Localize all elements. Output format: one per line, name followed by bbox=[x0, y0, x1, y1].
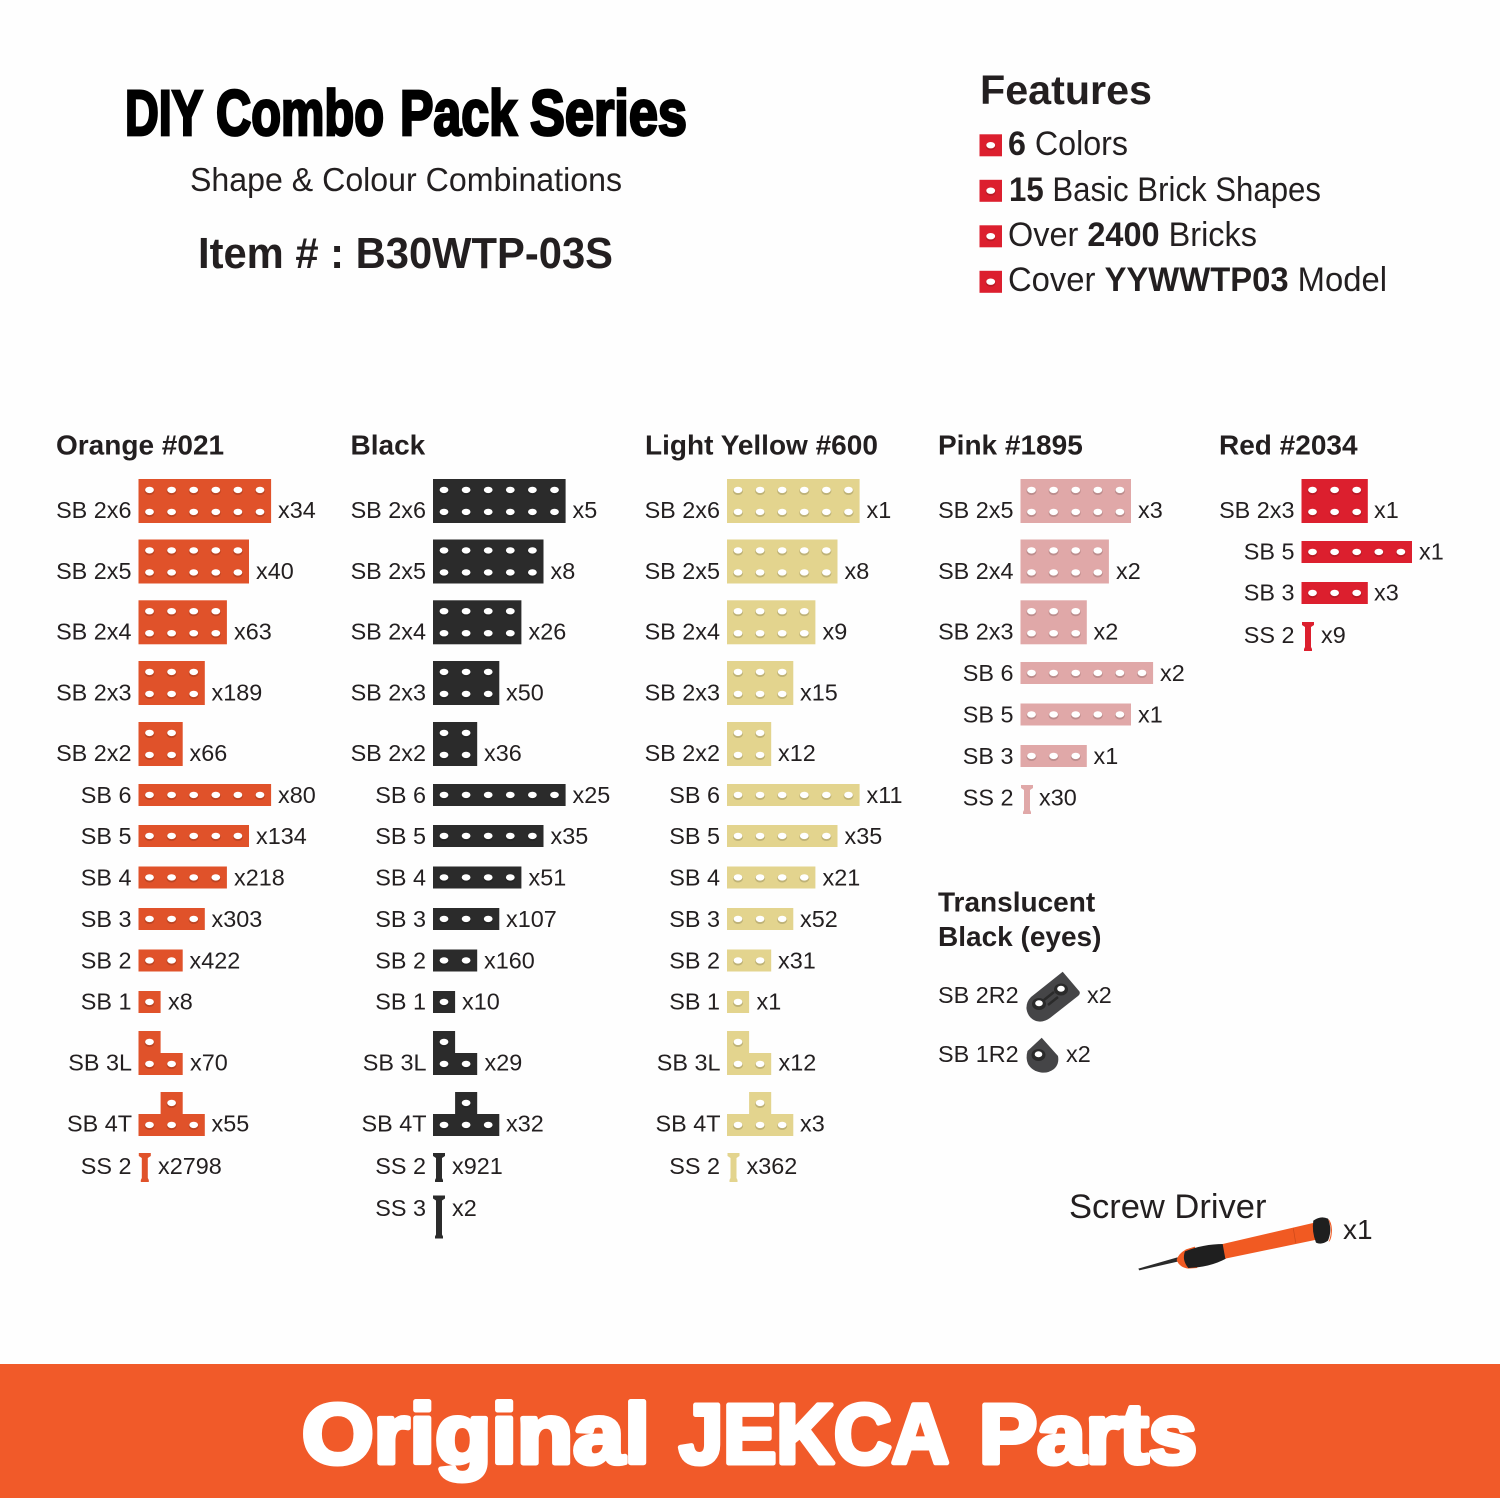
row: SB 2x2 bbox=[351, 722, 522, 766]
row: SB 2x4: x9 bbox=[822, 618, 847, 644]
heading: red: Red #2034 bbox=[1219, 430, 1358, 460]
row: SB 2x3: SB 2x3 bbox=[351, 680, 426, 706]
row: SS 3: x2 bbox=[452, 1195, 477, 1221]
row: SB 6 bbox=[81, 782, 316, 808]
row: SB 2x5 bbox=[645, 540, 869, 584]
row: SB 3L: x70 bbox=[190, 1050, 228, 1076]
feature: bricks: Over 2400 Bricks bbox=[1008, 216, 1257, 254]
row: SB 2: x31 bbox=[778, 948, 816, 974]
row: SB 5: SB 5 bbox=[375, 823, 426, 849]
row: SB 1: SB 1 bbox=[669, 988, 720, 1014]
row: SB 3: x1 bbox=[1094, 743, 1118, 769]
row: SB 4T: x32 bbox=[506, 1110, 544, 1136]
row: SB 6: x25 bbox=[572, 782, 610, 808]
row: SB 2x4: x63 bbox=[234, 618, 272, 644]
row: SS 2: x921 bbox=[452, 1153, 503, 1179]
row: SB 6 bbox=[375, 782, 610, 808]
row: SB 2x4: SB 2x4 bbox=[938, 558, 1014, 584]
row: SS 2: x9 bbox=[1321, 622, 1346, 648]
row: SB 2x3 bbox=[351, 661, 544, 706]
row: SB 6: SB 6 bbox=[375, 782, 426, 808]
row: SB 2x3: x1 bbox=[1374, 497, 1399, 523]
row: SB 2x2: x36 bbox=[484, 740, 522, 766]
row: SB 3L: x29 bbox=[484, 1050, 522, 1076]
row: SB 2x2: SB 2x2 bbox=[351, 740, 426, 766]
row: SB 1R2 bbox=[938, 1038, 1091, 1073]
row: SB 2: x422 bbox=[190, 948, 240, 974]
features heading: Features bbox=[980, 67, 1152, 113]
row: SB 3: SB 3 bbox=[963, 743, 1014, 769]
row: SS 2 bbox=[963, 784, 1077, 814]
row: SB 5: x1 bbox=[1138, 702, 1163, 728]
icon: bullet 4 bbox=[980, 271, 1002, 293]
row: SB 3 bbox=[1244, 580, 1399, 606]
row: SS 2 bbox=[81, 1153, 222, 1182]
row: SB 2x3: x189 bbox=[212, 680, 262, 706]
row: SB 6: x80 bbox=[278, 782, 316, 808]
row: SB 1: SB 1 bbox=[375, 988, 426, 1014]
title bbox=[125, 77, 687, 149]
row: SB 3: x52 bbox=[800, 906, 838, 932]
feature: shapes: 15 Basic Brick Shapes bbox=[1009, 171, 1321, 209]
row: SB 1R2: x2 bbox=[1066, 1041, 1091, 1067]
row: SB 2x5: SB 2x5 bbox=[938, 497, 1014, 523]
row: SB 2R2: SB 2R2 bbox=[938, 982, 1019, 1008]
row: SB 2x4: SB 2x4 bbox=[56, 618, 132, 644]
row: SB 2x3 bbox=[938, 600, 1118, 644]
row: SB 4: SB 4 bbox=[81, 864, 132, 890]
row: SB 1 bbox=[669, 988, 781, 1014]
row: SB 2x4 bbox=[938, 540, 1141, 584]
row: SB 2x3: SB 2x3 bbox=[938, 618, 1014, 644]
title: DIY bbox=[125, 77, 203, 149]
row: SB 2x6 bbox=[56, 479, 316, 523]
row: SB 4 bbox=[669, 864, 860, 890]
row: SB 4: x51 bbox=[528, 864, 566, 890]
row: SB 4: SB 4 bbox=[375, 864, 426, 890]
feature: model: Cover YYWWTP03 Model bbox=[1008, 261, 1387, 299]
row: SB 4 bbox=[81, 864, 285, 890]
row: SB 2x3 bbox=[1219, 479, 1399, 523]
row: SB 2x5 bbox=[938, 479, 1163, 523]
row: SB 2x5 bbox=[351, 540, 575, 584]
row: SB 3: x107 bbox=[506, 906, 557, 932]
row: SB 2: x160 bbox=[484, 948, 535, 974]
row: SB 2x3: x50 bbox=[506, 680, 544, 706]
row: SB 2x6: x1 bbox=[866, 497, 891, 523]
row: SB 2x4: x26 bbox=[528, 618, 566, 644]
footer text: Original bbox=[302, 1387, 650, 1481]
row: SB 1: x10 bbox=[462, 988, 500, 1014]
title: Pack bbox=[400, 77, 517, 149]
row: SB 5 bbox=[963, 702, 1163, 728]
heading: black: Black bbox=[350, 430, 426, 460]
row: SB 6: x2 bbox=[1160, 660, 1185, 686]
row: SB 2x5: x8 bbox=[844, 558, 869, 584]
row: SB 2x4 bbox=[351, 600, 566, 644]
row: SB 5: SB 5 bbox=[963, 702, 1014, 728]
row: SS 2: SS 2 bbox=[375, 1153, 426, 1179]
feature: colors: 6 Colors bbox=[1008, 125, 1128, 163]
panel: features bbox=[980, 67, 1387, 299]
row: SB 5: SB 5 bbox=[81, 823, 132, 849]
row: SS 2: SS 2 bbox=[963, 784, 1014, 810]
row: SB 6 bbox=[963, 660, 1185, 686]
row: SB 2x6: SB 2x6 bbox=[645, 497, 720, 523]
row: SB 5: SB 5 bbox=[1244, 538, 1294, 564]
row: SB 3: SB 3 bbox=[1244, 580, 1294, 606]
row: SB 3L bbox=[363, 1031, 522, 1076]
row: SB 4T bbox=[656, 1092, 825, 1136]
row: SB 3: SB 3 bbox=[81, 906, 132, 932]
footer banner bbox=[0, 1364, 1500, 1498]
row: SB 4T: SB 4T bbox=[362, 1110, 426, 1136]
row: SB 6: SB 6 bbox=[963, 660, 1014, 686]
panel: pink parts bbox=[938, 430, 1185, 814]
icon: bullet 2 bbox=[980, 180, 1002, 202]
row: SS 2 bbox=[669, 1153, 797, 1182]
row: SB 3: x3 bbox=[1374, 580, 1399, 606]
row: SB 4T: SB 4T bbox=[656, 1110, 720, 1136]
row: SB 1R2: SB 1R2 bbox=[938, 1041, 1019, 1067]
screw driver count: x1 bbox=[1343, 1214, 1373, 1245]
row: SB 2x4: SB 2x4 bbox=[351, 618, 426, 644]
row: SB 2R2 bbox=[938, 972, 1112, 1022]
row: SB 1: x1 bbox=[756, 988, 781, 1014]
row: SB 2x4: SB 2x4 bbox=[645, 618, 720, 644]
row: SB 4 bbox=[375, 864, 566, 890]
row: SB 3L: x12 bbox=[778, 1050, 816, 1076]
row: SB 2x2: x12 bbox=[778, 740, 816, 766]
label: screw driver: Screw Driver bbox=[1069, 1188, 1266, 1226]
row: SB 4T bbox=[67, 1092, 249, 1136]
row: SB 6: SB 6 bbox=[81, 782, 132, 808]
row: SS 2 bbox=[375, 1153, 503, 1182]
row: SS 3 bbox=[375, 1195, 477, 1238]
row: SS 2: SS 2 bbox=[669, 1153, 720, 1179]
row: SB 2x5: SB 2x5 bbox=[56, 558, 132, 584]
icon: bullet 3 bbox=[980, 225, 1002, 247]
row: SB 2: SB 2 bbox=[81, 948, 132, 974]
panel: black parts bbox=[350, 430, 610, 1238]
heading: light yellow: Light Yellow #600 bbox=[645, 430, 878, 460]
row: SB 3 bbox=[669, 906, 838, 932]
row: SB 2x3: SB 2x3 bbox=[56, 680, 132, 706]
row: SB 2x6: SB 2x6 bbox=[56, 497, 132, 523]
panel: red parts bbox=[1219, 430, 1444, 651]
footer text: JEKCA bbox=[679, 1387, 949, 1481]
row: SB 2x3: x2 bbox=[1094, 618, 1118, 644]
row: SB 2x2: SB 2x2 bbox=[645, 740, 720, 766]
row: SB 2x4 bbox=[645, 600, 847, 644]
row: SB 5 bbox=[81, 823, 307, 849]
icon: bullet 1 bbox=[980, 134, 1002, 156]
row: SB 2 bbox=[81, 948, 240, 974]
row: SB 3: SB 3 bbox=[375, 906, 426, 932]
row: SB 4T: x3 bbox=[800, 1110, 825, 1136]
row: SB 2x2 bbox=[645, 722, 816, 766]
row: SB 2x5: x3 bbox=[1138, 497, 1163, 523]
row: SB 2: SB 2 bbox=[375, 948, 426, 974]
row: SB 2x4 bbox=[56, 600, 272, 644]
row: SB 2x5: x8 bbox=[550, 558, 575, 584]
row: SB 2x6: x5 bbox=[572, 497, 597, 523]
row: SB 1 bbox=[375, 988, 500, 1014]
row: SB 6: SB 6 bbox=[669, 782, 720, 808]
row: SB 5 bbox=[1244, 538, 1444, 564]
row: SB 1: SB 1 bbox=[81, 988, 132, 1014]
row: SB 1: x8 bbox=[168, 988, 193, 1014]
row: SS 2: SS 2 bbox=[1244, 622, 1294, 648]
icon: screw driver bbox=[1138, 1217, 1332, 1270]
row: SB 2x5: SB 2x5 bbox=[351, 558, 426, 584]
footer text: Parts bbox=[979, 1387, 1197, 1481]
panel: orange parts bbox=[56, 430, 316, 1182]
row: SB 2x5 bbox=[56, 540, 294, 584]
title: Combo bbox=[216, 77, 384, 149]
row: SB 2R2: x2 bbox=[1087, 982, 1112, 1008]
row: SB 5: SB 5 bbox=[669, 823, 720, 849]
row: SB 2x2: SB 2x2 bbox=[56, 740, 132, 766]
row: SB 4: x21 bbox=[822, 864, 860, 890]
row: SB 2: SB 2 bbox=[669, 948, 720, 974]
row: SB 2x3: SB 2x3 bbox=[645, 680, 720, 706]
row: SB 5: x35 bbox=[550, 823, 588, 849]
heading: eyes: Black (eyes) bbox=[938, 921, 1101, 952]
heading: translucent black: Translucent bbox=[938, 886, 1095, 918]
footer text bbox=[302, 1387, 1197, 1481]
row: SB 3 bbox=[375, 906, 557, 932]
row: SB 2 bbox=[375, 948, 535, 974]
row: SB 5 bbox=[669, 823, 882, 849]
row: SB 4: x218 bbox=[234, 864, 285, 890]
row: SS 2 bbox=[1244, 622, 1346, 651]
row: SB 3L bbox=[68, 1031, 228, 1076]
row: SB 4T bbox=[362, 1092, 544, 1136]
row: SB 1 bbox=[81, 988, 193, 1014]
heading: orange: Orange #021 bbox=[56, 430, 224, 460]
row: SB 2x5: x40 bbox=[256, 558, 294, 584]
item number: Item # : B30WTP-03S bbox=[198, 229, 613, 278]
row: SB 3: SB 3 bbox=[669, 906, 720, 932]
row: SS 2: SS 2 bbox=[81, 1153, 132, 1179]
row: SB 2x3 bbox=[56, 661, 262, 706]
heading: pink: Pink #1895 bbox=[938, 430, 1083, 460]
row: SB 2x6 bbox=[645, 479, 891, 523]
row: SB 3: x303 bbox=[212, 906, 262, 932]
row: SB 2x2: x66 bbox=[190, 740, 227, 766]
row: SB 6 bbox=[669, 782, 902, 808]
panel: light yellow parts bbox=[645, 430, 902, 1182]
row: SS 2: x30 bbox=[1039, 784, 1077, 810]
row: SB 5 bbox=[375, 823, 588, 849]
row: SB 3 bbox=[81, 906, 262, 932]
title: Series bbox=[530, 77, 687, 149]
row: SB 3L: SB 3L bbox=[657, 1050, 720, 1076]
row: SB 2x5: SB 2x5 bbox=[645, 558, 720, 584]
row: SS 2: x362 bbox=[746, 1153, 797, 1179]
panel: translucent black parts bbox=[938, 886, 1112, 1073]
row: SB 2 bbox=[669, 948, 816, 974]
row: SB 5: x35 bbox=[844, 823, 882, 849]
row: SB 2x6: x34 bbox=[278, 497, 316, 523]
row: SB 5: x134 bbox=[256, 823, 307, 849]
row: SB 2x6 bbox=[351, 479, 597, 523]
row: SB 6: x11 bbox=[866, 782, 902, 808]
subtitle: Shape & Colour Combinations bbox=[190, 161, 622, 198]
row: SB 3L: SB 3L bbox=[363, 1050, 426, 1076]
row: SB 3L bbox=[657, 1031, 816, 1076]
row: SB 2x4: x2 bbox=[1116, 558, 1141, 584]
row: SB 4: SB 4 bbox=[669, 864, 720, 890]
row: SB 2x6: SB 2x6 bbox=[351, 497, 426, 523]
row: SB 5: x1 bbox=[1419, 538, 1444, 564]
row: SB 2x3: SB 2x3 bbox=[1219, 497, 1294, 523]
row: SS 3: SS 3 bbox=[375, 1195, 426, 1221]
row: SS 2: x2798 bbox=[158, 1153, 222, 1179]
row: SB 4T: x55 bbox=[212, 1110, 249, 1136]
row: SB 2x3 bbox=[645, 661, 838, 706]
row: SB 3 bbox=[963, 743, 1118, 769]
row: SB 2x3: x15 bbox=[800, 680, 838, 706]
row: SB 2x2 bbox=[56, 722, 227, 766]
row: SB 3L: SB 3L bbox=[68, 1050, 132, 1076]
row: SB 4T: SB 4T bbox=[67, 1110, 132, 1136]
